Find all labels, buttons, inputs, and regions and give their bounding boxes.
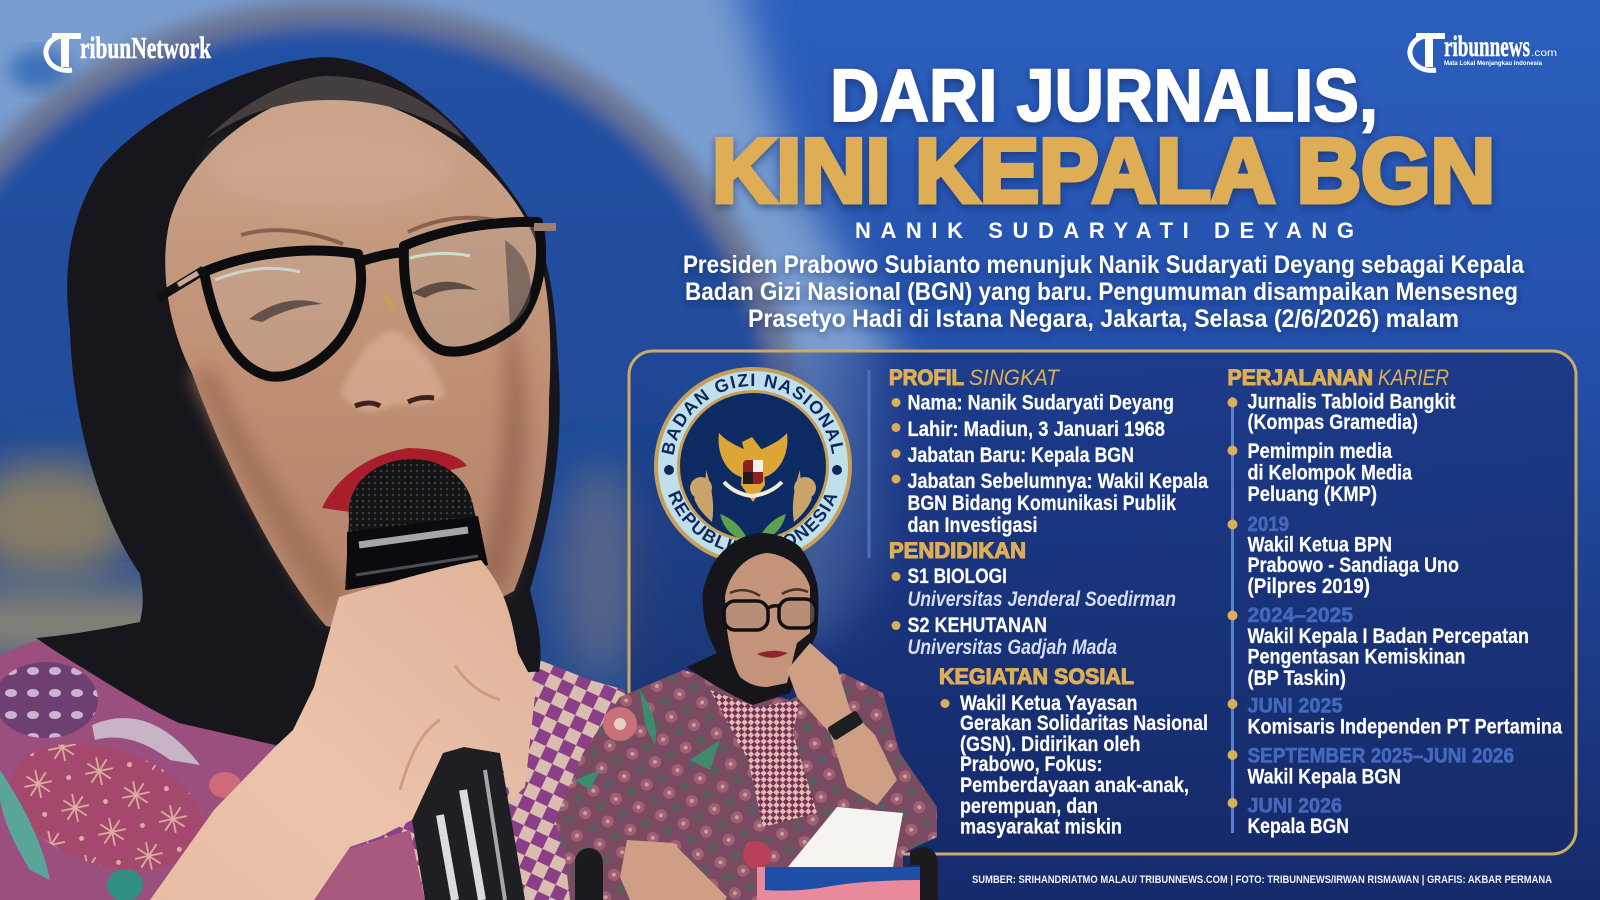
subtitle: name: NANIK SUDARYATI DEYANG — [855, 218, 1354, 243]
mouth — [757, 651, 788, 658]
heading: perjalanan karier: KARIER — [1378, 365, 1449, 390]
education list: Universitas Jenderal Soedirman — [908, 588, 1176, 611]
microphone head — [345, 459, 488, 590]
profile list — [908, 392, 1208, 537]
profile list: Jabatan Baru: Kepala BGN — [908, 444, 1134, 467]
glasses — [158, 222, 556, 377]
education list: S2 KEHUTANAN — [908, 614, 1047, 637]
logo: Tribunnews.com: ribunnews — [1444, 30, 1530, 63]
timeline — [1228, 397, 1238, 833]
tissue — [788, 807, 903, 867]
social activity text: (GSN). Didirikan oleh — [960, 733, 1140, 756]
emblem: Badan Gizi Nasional — [654, 367, 852, 558]
career entries: (Pilpres 2019) — [1248, 575, 1370, 598]
social activity text: Wakil Ketua Yayasan — [960, 692, 1138, 715]
career entries: Wakil Kepala BGN — [1248, 766, 1401, 788]
heading: perjalanan karier: PERJALANAN — [1228, 365, 1373, 390]
black hijab — [36, 57, 560, 745]
intro paragraph: Presiden Prabowo Subianto menunjuk Nanik Sudaryati Deyang sebagai Kepala — [683, 251, 1525, 279]
lips — [322, 448, 467, 512]
tissue box — [757, 867, 922, 900]
career entries: Pemimpin media — [1248, 440, 1392, 463]
eyes — [249, 282, 477, 322]
bullets — [892, 398, 900, 630]
hand and arm — [787, 643, 897, 805]
blouse motifs — [575, 690, 771, 869]
heading: kegiatan sosial: KEGIATAN SOSIAL — [939, 664, 1134, 689]
social activity text: perempuan, dan — [960, 795, 1098, 818]
career entries — [1248, 390, 1562, 838]
face shading — [190, 130, 526, 620]
hair line — [205, 76, 465, 140]
logo: Tribunnews.com — [1410, 30, 1557, 70]
heading: profil singkat: SINGKAT — [969, 365, 1060, 390]
nostrils — [355, 398, 434, 406]
logo: Tribunnews.com: Mata Lokal Menjangkau Indonesia — [1444, 60, 1542, 67]
career entries: Prabowo - Sandiaga Uno — [1248, 554, 1459, 577]
profile list: Lahir: Madiun, 3 Januari 1968 — [908, 418, 1165, 441]
main photo: woman speaking into microphone — [0, 57, 625, 900]
chair — [575, 847, 938, 900]
career entries: (BP Taskin) — [1248, 667, 1346, 690]
intro paragraph — [683, 251, 1525, 333]
career entries: Kepala BGN — [1248, 815, 1349, 838]
knuckle folds — [400, 665, 500, 790]
education list — [908, 565, 1176, 659]
social activity text: masyarakat miskin — [960, 816, 1122, 838]
career entries: Wakil Kepala I Badan Percepatan — [1248, 625, 1529, 648]
career entries: 2019 — [1248, 513, 1289, 536]
glasses — [724, 599, 816, 630]
hijab — [687, 533, 818, 705]
logo: Tribunnews.com: .com — [1531, 48, 1557, 59]
hands — [690, 470, 816, 522]
education list: S1 BIOLOGI — [908, 565, 1007, 588]
emblem: Badan Gizi Nasional: REPUBLIK INDONESIA — [668, 490, 838, 550]
wristwatch — [827, 710, 864, 741]
heading: profil singkat — [889, 365, 1060, 390]
title — [712, 54, 1495, 222]
title: KINI KEPALA BGN — [712, 121, 1495, 222]
eyebrows — [730, 589, 808, 596]
social activity text: Gerakan Solidaritas Nasional — [960, 712, 1208, 735]
title: DARI JURNALIS, — [830, 54, 1378, 137]
leaves — [720, 514, 748, 540]
face — [165, 92, 550, 640]
profile list: BGN Bidang Komunikasi Publik — [908, 492, 1176, 515]
hand — [150, 560, 536, 900]
profile list: dan Investigasi — [908, 514, 1038, 537]
face — [725, 553, 810, 687]
social activity text — [940, 692, 1208, 838]
heading: perjalanan karier — [1228, 365, 1449, 390]
career entries: JUNI 2026 — [1248, 794, 1342, 818]
blouse — [555, 670, 937, 900]
career entries: JUNI 2025 — [1248, 694, 1343, 718]
profile list: Nama: Nanik Sudaryati Deyang — [908, 392, 1174, 414]
emblem: Badan Gizi Nasional: BADAN GIZI NASIONAL — [661, 374, 843, 455]
column: profil singkat — [869, 365, 1208, 838]
logo: TribunNetwork: ribunNetwork — [80, 30, 212, 65]
career entries: di Kelompok Media — [1248, 462, 1412, 484]
logo: TribunNetwork — [46, 30, 212, 70]
social activity text: Prabowo, Fokus: — [960, 753, 1102, 776]
career entries: Wakil Ketua BPN — [1248, 534, 1392, 556]
scarf — [710, 690, 817, 827]
heading: profil singkat: PROFIL — [889, 365, 964, 390]
career entries: Peluang (KMP) — [1248, 483, 1377, 506]
eyebrows — [241, 218, 494, 244]
batik blouse — [0, 640, 625, 900]
profile list: Jabatan Sebelumnya: Wakil Kepala — [908, 470, 1208, 493]
microphone handle — [412, 747, 525, 900]
social activity text: Pemberdayaan anak-anak, — [960, 774, 1189, 797]
eagle — [719, 433, 787, 502]
career entries: SEPTEMBER 2025–JUNI 2026 — [1248, 744, 1514, 768]
education list: Universitas Gadjah Mada — [908, 636, 1117, 659]
photo: seated woman — [555, 533, 938, 900]
intro paragraph: Badan Gizi Nasional (BGN) yang baru. Pengumuman disampaikan Mensesneg — [685, 278, 1518, 306]
nose — [340, 330, 445, 411]
career entries: (Kompas Gramedia) — [1248, 411, 1418, 434]
career entries: Pengentasan Kemiskinan — [1248, 646, 1466, 668]
career entries: 2024–2025 — [1248, 604, 1353, 627]
left hand — [620, 840, 727, 900]
career entries: Jurnalis Tabloid Bangkit — [1248, 390, 1456, 414]
column: perjalanan karier — [1228, 365, 1562, 838]
intro paragraph: Prasetyo Hadi di Istana Negara, Jakarta, Selasa (2/6/2026) malam — [748, 305, 1459, 333]
panel: info card — [629, 351, 1576, 854]
heading: pendidikan: PENDIDIKAN — [889, 538, 1026, 563]
